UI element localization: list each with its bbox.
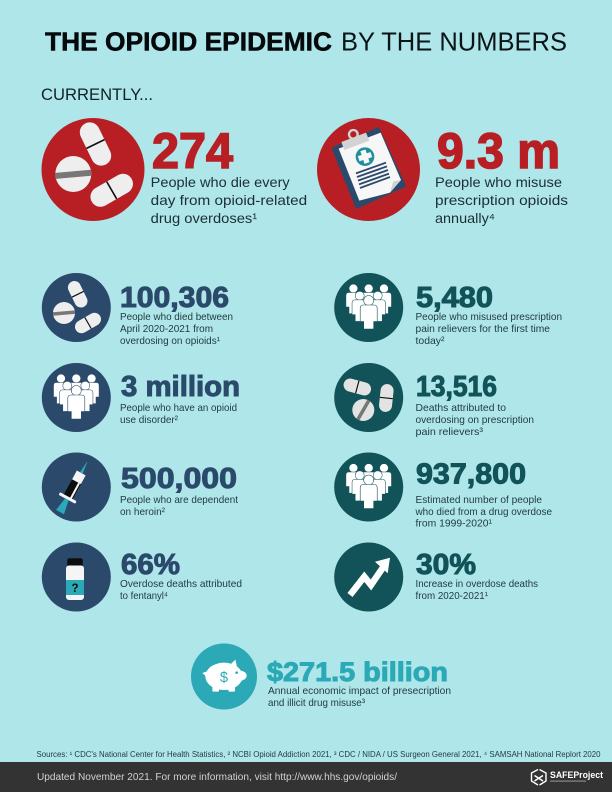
stat: 5,480 xyxy=(416,282,493,314)
description: overdosing on opioids¹ xyxy=(120,336,221,347)
description: Annual economic impact of presecription xyxy=(268,686,451,697)
icon: pills on red circle xyxy=(42,118,144,221)
panel: 500,000 xyxy=(42,452,238,522)
stat: 9.3 m: 9.3 m xyxy=(437,123,560,179)
description xyxy=(415,495,552,530)
title: BY THE NUMBERS xyxy=(341,28,567,56)
icon: rising arrow xyxy=(334,542,403,612)
stat: 100,306 xyxy=(120,282,229,314)
logo: SAFEProject xyxy=(532,770,604,785)
panel: 937,800 xyxy=(334,452,552,530)
description xyxy=(120,403,237,426)
description xyxy=(416,403,534,438)
panel: 3 million xyxy=(42,363,240,432)
description xyxy=(151,174,307,226)
description: day from opioid-related xyxy=(151,192,307,208)
description xyxy=(268,686,451,709)
stat: 30% xyxy=(416,549,476,581)
icon: pills xyxy=(334,363,403,432)
icon: clipboard on red circle xyxy=(317,118,420,221)
description: pain relievers for the first time xyxy=(416,324,550,335)
description: from 1999-2020¹ xyxy=(416,518,493,530)
stat: 3 million xyxy=(121,371,240,403)
icon: people xyxy=(334,452,403,522)
logo: SAFEProject: SAFEProject xyxy=(550,770,604,781)
description: annually⁴ xyxy=(435,210,495,226)
stat: 500,000 xyxy=(121,463,237,495)
icon: piggy bank: $ xyxy=(220,670,228,686)
description: from 2020-2021¹ xyxy=(416,591,489,602)
description: on heroin² xyxy=(120,507,166,518)
stat: 937,800 xyxy=(416,458,526,490)
panel: 5,480 xyxy=(334,273,562,347)
description: Deaths attributed to xyxy=(416,403,506,414)
description: Increase in overdose deaths xyxy=(416,579,538,590)
description: today² xyxy=(416,336,445,347)
icon: people xyxy=(42,363,111,432)
icon: people xyxy=(334,273,403,342)
description: People who misused prescription xyxy=(416,312,562,323)
description xyxy=(435,174,568,226)
description: and illicit drug misuse³ xyxy=(268,698,366,709)
description: prescription opioids xyxy=(435,192,568,208)
description: People who are dependent xyxy=(120,495,238,506)
description: overdosing on prescription xyxy=(416,415,534,426)
stat: 274: 274 xyxy=(152,123,233,179)
description: People who have an opioid xyxy=(120,403,237,414)
panel: economic impact xyxy=(191,644,451,710)
panel: 66% xyxy=(42,542,242,612)
description xyxy=(120,579,242,602)
title xyxy=(45,28,567,56)
icon: syringe xyxy=(42,452,111,522)
description: to fentanyl⁴ xyxy=(120,591,168,602)
panel: 13,516 xyxy=(334,363,534,438)
footer text: Updated November 2021. For more information, visit http://www.hhs.gov/opioids/ xyxy=(37,771,397,783)
description: use disorder² xyxy=(120,415,179,426)
panel: 274 deaths per day xyxy=(42,118,307,226)
description xyxy=(120,312,233,347)
description xyxy=(120,495,238,518)
stat: 66% xyxy=(121,549,180,581)
title: THE OPIOID EPIDEMIC xyxy=(45,28,332,56)
description: pain relievers³ xyxy=(416,427,484,438)
description xyxy=(416,312,562,347)
icon: piggy bank xyxy=(191,644,257,710)
icon: bottle xyxy=(42,542,111,612)
sources: Sources: ¹ CDC's National Center for Health Statistics, ² NCBI Opioid Addiction 2021, ³ CDC / NIDA / US Surgeon General 2021, ⁴ SAMSAH National Replort 2020 xyxy=(36,750,601,759)
description: People who died between xyxy=(120,312,233,323)
heading: currently: CURRENTLY... xyxy=(41,86,153,104)
description: Overdose deaths attributed xyxy=(120,579,242,590)
description: People who die every xyxy=(151,174,290,190)
panel: 100,306 xyxy=(42,273,233,347)
description: drug overdoses¹ xyxy=(151,210,258,226)
description: who died from a drug overdose xyxy=(415,507,552,518)
stat: $271.5 billion xyxy=(267,657,448,687)
stat: 13,516 xyxy=(416,371,497,403)
icon: pills xyxy=(42,273,111,342)
description: People who misuse xyxy=(435,174,562,190)
description: April 2020-2021 from xyxy=(120,324,213,335)
description: Estimated number of people xyxy=(416,495,542,506)
description xyxy=(416,579,538,602)
footer bar xyxy=(0,762,612,792)
icon: bottle: ? xyxy=(71,583,79,595)
panel: 9.3 m misuse xyxy=(317,118,568,226)
panel: 30% xyxy=(334,542,538,612)
